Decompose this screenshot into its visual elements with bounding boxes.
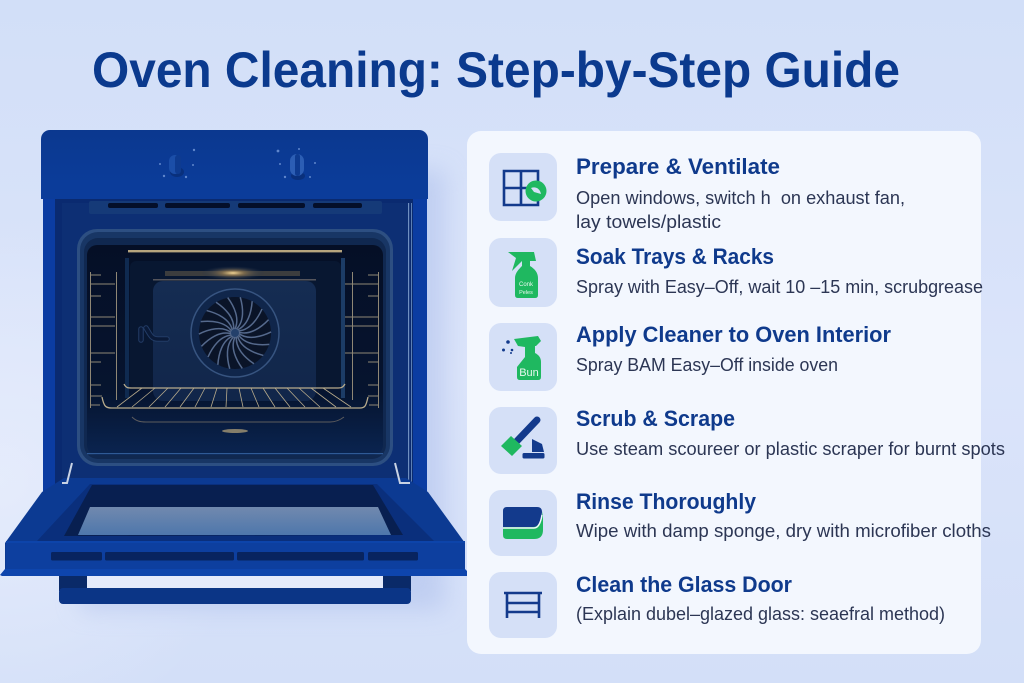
panel: steps [467, 131, 1005, 654]
step 1 text: Open windows, switch h on exhaust fan, [576, 188, 905, 208]
icon: spray bottle: Peles [519, 290, 533, 296]
icon: spray bottle with droplets: Bun [519, 367, 539, 379]
control panel [41, 130, 428, 199]
icon: spray bottle: Conk [519, 282, 534, 288]
right side rack [345, 272, 379, 408]
step 1 text: Prepare & Ventilate [576, 154, 780, 179]
oven shadow [80, 170, 445, 610]
title: Oven Cleaning: Step-by-Step Guide [92, 42, 900, 98]
step 4 text [576, 406, 1005, 459]
step 2 text: Soak Trays & Racks [576, 244, 774, 269]
step 3 text: Apply Cleaner to Oven Interior [576, 322, 891, 347]
lamp glow [165, 271, 300, 276]
fan [191, 289, 279, 377]
icon: spray bottle with droplets [489, 323, 557, 391]
lower rack reflection [132, 417, 344, 422]
step 4 [489, 406, 1005, 474]
icon: brush and scraper [489, 407, 557, 474]
icon: sponge [489, 490, 557, 556]
oven body frame [43, 190, 427, 495]
step 4 text: Use steam scoureer or plastic scraper for burnt spots [576, 439, 1005, 459]
step 6 text: Clean the Glass Door [576, 572, 792, 597]
step 6 [489, 572, 945, 638]
cavity [77, 229, 393, 466]
door vents [51, 552, 418, 560]
step 1 [489, 153, 905, 232]
glass reflection [78, 507, 391, 535]
step 5 text: Rinse Thoroughly [576, 489, 756, 514]
step 2 text: Spray with Easy–Off, wait 10 –15 min, scrubgrease [576, 277, 983, 297]
top heating element [128, 250, 342, 252]
knob left [159, 149, 195, 178]
step 5 [489, 489, 991, 556]
step 2 text [576, 244, 983, 297]
step 4 text: Scrub & Scrape [576, 406, 735, 431]
step 1 text [576, 154, 905, 232]
icon: window with fan [489, 153, 557, 221]
step 3 text [576, 322, 891, 375]
door window [64, 485, 403, 536]
step 2 [489, 238, 983, 307]
step 1 text: lay towels/plastic [576, 212, 721, 232]
step 6 text: (Explain dubel–glazed glass: seaefral method) [576, 604, 945, 624]
step 5 text [576, 489, 991, 541]
icon: spray bottle [489, 238, 557, 307]
hinges [62, 463, 410, 483]
step 3 text: Spray BAM Easy–Off inside oven [576, 355, 838, 375]
step 6 text [576, 572, 945, 624]
left side rack [90, 272, 116, 408]
icon: glass door rack [489, 572, 557, 638]
oven rack [102, 384, 368, 408]
handle [59, 576, 411, 604]
step 3 [489, 322, 891, 391]
hook [141, 328, 167, 340]
oven illustration [0, 130, 471, 610]
door [0, 478, 471, 576]
top vent [89, 201, 382, 214]
step 5 text: Wipe with damp sponge, dry with microfiber cloths [576, 521, 991, 541]
knob right [277, 148, 316, 180]
